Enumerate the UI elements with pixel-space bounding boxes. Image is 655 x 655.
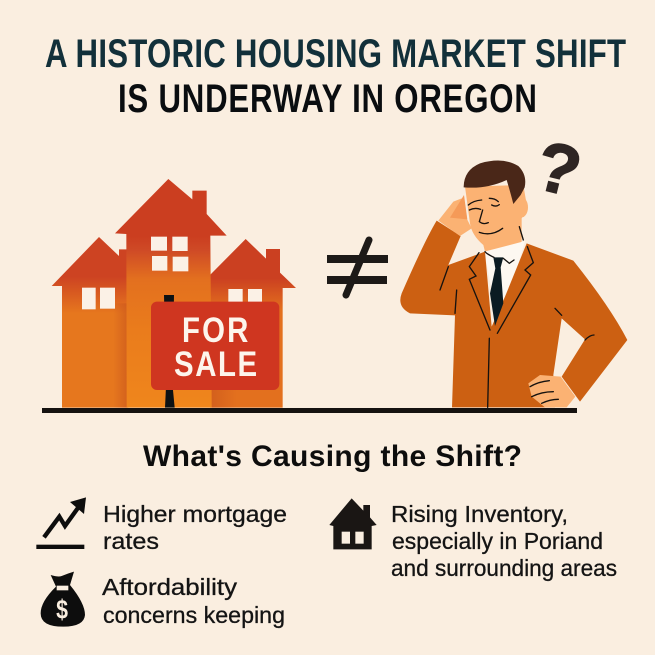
sign post xyxy=(164,295,175,408)
text xyxy=(103,501,287,554)
cause: higher mortgage rates xyxy=(36,497,287,554)
left house xyxy=(52,237,128,408)
resting hand xyxy=(528,375,575,407)
raised hand xyxy=(438,198,472,236)
text xyxy=(102,574,285,628)
not equal sign xyxy=(327,240,388,295)
heading: what's causing the shift: What's Causing the Shift? xyxy=(143,440,522,473)
line 1: Higher mortgage xyxy=(103,501,287,527)
line 2: concerns keeping xyxy=(103,602,285,628)
sign board xyxy=(151,302,279,390)
line 3: and surrounding areas xyxy=(391,555,617,581)
title line 1: A HISTORIC HOUSING MARKET SHIFT xyxy=(45,31,626,76)
sign text xyxy=(174,311,257,384)
icon: rising chart arrow xyxy=(36,497,86,549)
center house xyxy=(115,179,227,408)
ear xyxy=(515,197,528,217)
shirt xyxy=(484,241,525,305)
question mark: ? xyxy=(528,126,589,212)
illustration: houses with for sale sign xyxy=(52,179,296,408)
fingers xyxy=(450,195,467,219)
line 2: especially in Poriand xyxy=(392,528,603,554)
title line 2: IS UNDERWAY IN OREGON xyxy=(118,76,537,121)
sign word: for: FOR xyxy=(182,311,248,350)
illustration: thinking man xyxy=(400,126,627,407)
text xyxy=(391,501,617,581)
neck and face xyxy=(465,185,527,258)
ground line xyxy=(42,408,577,413)
title xyxy=(45,31,626,121)
jacket xyxy=(400,221,627,407)
tie xyxy=(490,257,503,326)
hand lines xyxy=(530,381,558,403)
icon: money bag: $ xyxy=(56,595,68,625)
line 1: Aftordability xyxy=(102,574,238,600)
facial features and jacket lines xyxy=(440,198,594,407)
right house xyxy=(210,239,296,408)
cause: affordability concerns xyxy=(41,572,285,628)
icon: money bag xyxy=(41,572,85,627)
hair xyxy=(464,161,525,204)
line 1: Rising Inventory, xyxy=(391,501,568,527)
line 2: rates xyxy=(103,528,159,554)
sign word: sale: SALE xyxy=(174,345,257,384)
cause: rising inventory xyxy=(329,498,617,581)
icon: house xyxy=(329,498,377,549)
